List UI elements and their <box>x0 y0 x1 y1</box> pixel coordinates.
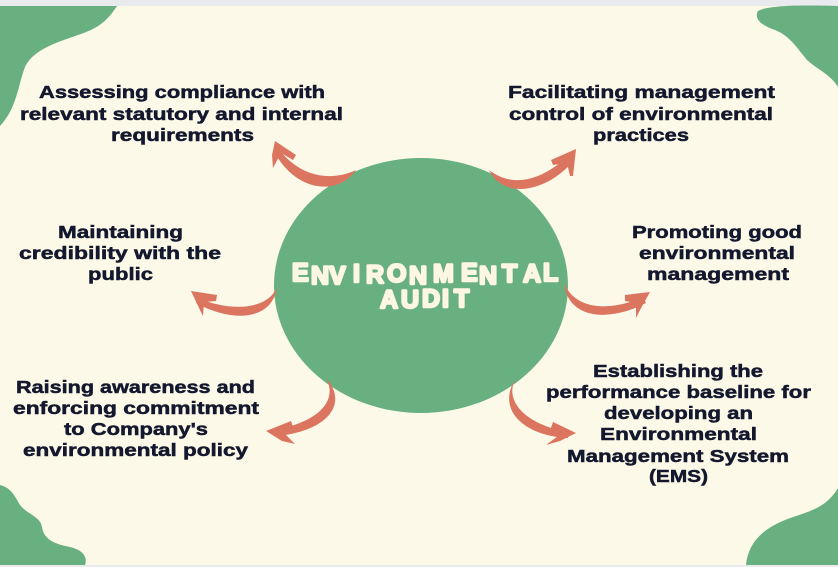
text: assessing compliance: requirements <box>111 125 254 145</box>
text: raising awareness: to Company's <box>64 419 208 439</box>
text: assessing compliance: relevant statutory and internal <box>20 104 343 124</box>
text: facilitating management: control of environmental <box>509 104 773 124</box>
text: promoting good <box>632 222 802 284</box>
arrow: lower right <box>509 378 576 445</box>
blob: top right <box>757 6 838 87</box>
text: maintaining credibility: Maintaining <box>58 222 183 242</box>
text: facilitating management: practices <box>593 125 689 145</box>
central circle <box>274 158 568 413</box>
blob: bottom left <box>0 485 86 565</box>
text: establishing baseline: Establishing the <box>593 361 763 381</box>
text: establishing baseline: Management System <box>567 446 789 466</box>
text: facilitating management: Facilitating management <box>508 82 775 102</box>
text: establishing baseline: performance baseline for <box>546 382 811 402</box>
text: maintaining credibility: public <box>88 264 153 284</box>
text: facilitating management <box>508 82 775 145</box>
arrow: middle left <box>191 287 277 316</box>
text: raising awareness: Raising awareness and <box>16 377 255 397</box>
title: environmental audit <box>292 259 558 314</box>
text: raising awareness <box>13 377 259 460</box>
blob: top left <box>0 6 117 126</box>
arrow: top right <box>489 149 576 189</box>
text: establishing baseline: developing an <box>604 403 753 423</box>
arrow: top left <box>272 141 356 187</box>
arrow: lower left <box>266 378 335 444</box>
text: assessing compliance: Assessing compliance with <box>39 82 325 102</box>
text: raising awareness: enforcing commitment <box>13 398 259 418</box>
text: raising awareness: environmental policy <box>23 440 248 460</box>
text: assessing compliance <box>20 82 343 145</box>
text: promoting good: environmental <box>639 243 795 263</box>
text: establishing baseline: (EMS) <box>649 466 708 486</box>
text: promoting good: management <box>647 264 789 284</box>
text: establishing baseline: Environmental <box>600 424 757 444</box>
text: establishing baseline <box>546 361 811 486</box>
title: environmental audit: ENVIRONMENTAL <box>292 259 558 290</box>
title: environmental audit: AUDIT <box>380 285 469 314</box>
text: maintaining credibility: credibility with the <box>19 243 221 263</box>
arrow: middle right <box>564 283 650 318</box>
text: maintaining credibility <box>19 222 221 284</box>
text: promoting good: Promoting good <box>632 222 802 242</box>
blob: bottom right <box>746 488 838 565</box>
